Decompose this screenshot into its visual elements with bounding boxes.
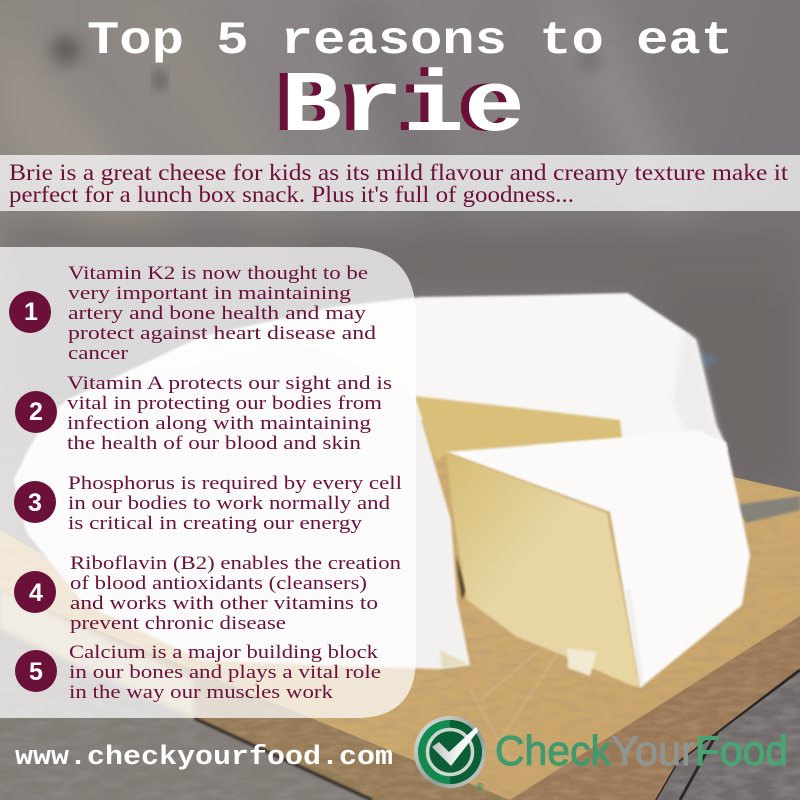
back of wheel bbox=[14, 293, 728, 480]
reason 1 text: very important in maintaining bbox=[68, 283, 352, 304]
title: Brie with maroon offset shadow: Brie bbox=[273, 58, 517, 156]
slice bbox=[446, 430, 750, 688]
number badge 2: 2 bbox=[29, 398, 43, 426]
website url: www.checkyourfood.com bbox=[15, 743, 393, 773]
reason 2 text: vital in protecting our bodies from bbox=[67, 393, 382, 414]
reason 2 text: Vitamin A protects our sight and is bbox=[67, 373, 392, 394]
registered mark: ® bbox=[476, 782, 484, 793]
number badge 4 bbox=[14, 571, 56, 613]
title: Top 5 reasons to eat: Top 5 reasons to eat bbox=[87, 15, 733, 67]
panel: five reasons bbox=[0, 247, 416, 718]
reason 3 text bbox=[68, 473, 402, 534]
reason 2 text: the health of our blood and skin bbox=[67, 433, 362, 454]
icon: CheckYourFood logo badge bbox=[414, 716, 486, 793]
reason 3 text: Phosphorus is required by every cell bbox=[68, 473, 402, 494]
logo wordmark: Check bbox=[495, 727, 612, 774]
gap shadow between wedge and slice bbox=[456, 555, 466, 600]
table lower left bbox=[0, 600, 520, 800]
reason 1 bbox=[9, 263, 377, 364]
back cut face bbox=[414, 396, 622, 462]
reason 5 text: in our bones and plays a vital role bbox=[69, 662, 381, 683]
number badge 3 bbox=[14, 481, 56, 523]
reason 4 text: Riboflavin (B2) enables the creation bbox=[70, 553, 402, 574]
reason 2 bbox=[15, 373, 392, 454]
number badge 2 bbox=[15, 391, 57, 433]
board top bbox=[0, 400, 800, 800]
reason 1 text: artery and bone health and may bbox=[68, 303, 367, 324]
number badge 5: 5 bbox=[29, 658, 43, 686]
number badge 4: 4 bbox=[29, 579, 43, 607]
knife bbox=[736, 496, 800, 523]
reason 5 text: in the way our muscles work bbox=[69, 682, 334, 703]
reason 5 text: Calcium is a major building block bbox=[69, 642, 379, 663]
reason 3 bbox=[14, 473, 402, 534]
number badge 5 bbox=[15, 650, 57, 692]
reason 3 text: is critical in creating our energy bbox=[68, 513, 363, 534]
board side bbox=[0, 590, 510, 800]
reason 1 text: Vitamin K2 is now thought to be bbox=[68, 263, 368, 284]
table lower right bbox=[640, 660, 800, 800]
number badge 1 bbox=[9, 291, 51, 333]
reason 4 text: and works with other vitamins to bbox=[70, 593, 378, 614]
reason 1 text bbox=[68, 263, 377, 364]
left wedge bbox=[14, 340, 470, 669]
logo wordmark bbox=[495, 727, 788, 774]
logo wordmark: Food bbox=[695, 727, 788, 774]
reason 3 text: in our bodies to work normally and bbox=[68, 493, 391, 514]
reason 2 text bbox=[67, 373, 392, 454]
intro text: perfect for a lunch box snack. Plus it's full of goodness... bbox=[9, 182, 574, 207]
reason 4 bbox=[14, 553, 402, 634]
number badge 1: 1 bbox=[24, 298, 38, 326]
intro text: Brie is a great cheese for kids as its mild flavour and creamy texture make it bbox=[9, 160, 789, 185]
reason 5 text bbox=[69, 642, 381, 703]
logo wordmark: Your bbox=[611, 727, 695, 774]
reason 4 text: of blood antioxidants (cleansers) bbox=[70, 573, 367, 594]
reason 1 text: cancer bbox=[68, 343, 129, 364]
reason 4 text: prevent chronic disease bbox=[70, 613, 286, 634]
intro text bbox=[9, 160, 789, 207]
reason 1 text: protect against heart disease and bbox=[68, 323, 377, 344]
title: Brie with maroon offset shadow: Brie bbox=[281, 58, 525, 156]
number badge 3: 3 bbox=[28, 489, 42, 517]
reason 5 bbox=[15, 642, 381, 703]
intro band bbox=[0, 155, 800, 211]
reason 4 text bbox=[70, 553, 402, 634]
reason 2 text: infection along with maintaining bbox=[67, 413, 372, 434]
